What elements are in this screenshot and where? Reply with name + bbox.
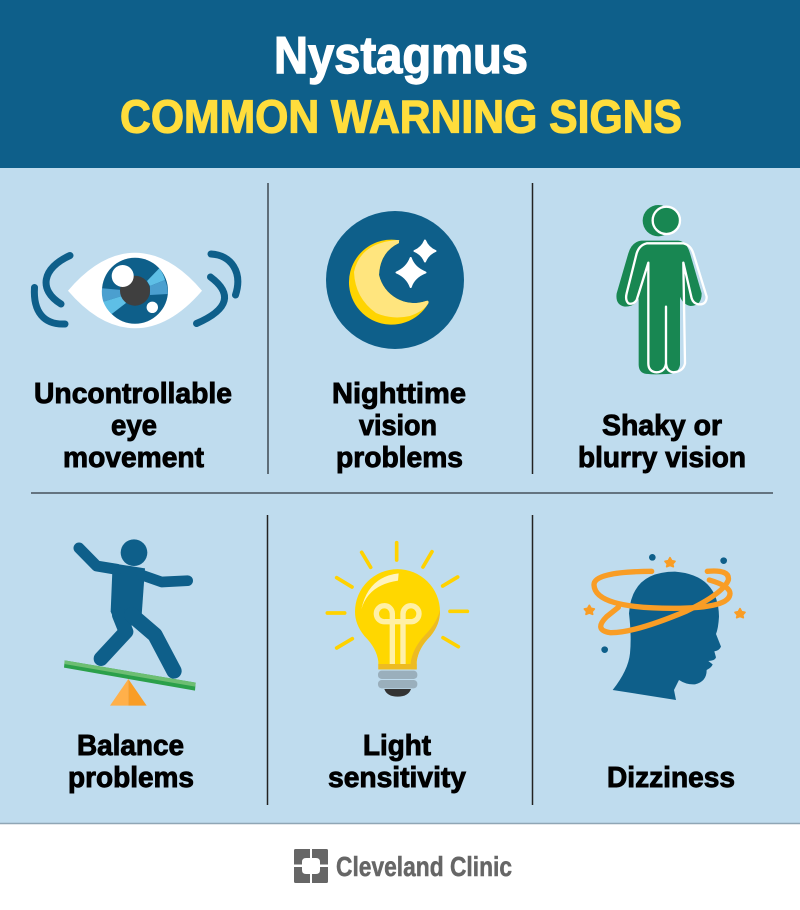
label: uncontrollable eye movement: Uncontrollable [34,378,232,410]
label: light sensitivity [328,730,466,794]
icon: eye [34,253,238,328]
label: light sensitivity: sensitivity [328,762,466,794]
panel: background [0,168,800,823]
subtitle: COMMON WARNING SIGNS [120,90,682,142]
label: light sensitivity: Light [363,730,431,762]
icon: moon and stars [326,211,464,349]
footer logo: Cleveland Clinic: Cleveland Clinic [336,851,512,882]
label: nighttime vision problems: Nighttime [332,378,466,410]
icon: dizzy head [584,554,745,700]
footer logo: Cleveland Clinic [294,849,512,883]
label: dizziness: Dizziness [607,762,735,794]
label: uncontrollable eye movement: eye [111,410,157,442]
label: nighttime vision problems: problems [336,442,463,474]
icon: light bulb [327,543,467,697]
label: balance problems [68,730,194,794]
label: balance problems: Balance [77,730,184,762]
logo mark [294,849,328,883]
label: shaky or blurry vision [578,410,746,474]
title: Nystagmus [274,27,528,85]
label: uncontrollable eye movement: movement [63,442,204,474]
label: balance problems: problems [68,762,194,794]
icon: person balancing on seesaw [64,539,196,706]
label: nighttime vision problems: vision [359,410,437,442]
label: shaky or blurry vision: Shaky or [602,410,722,442]
label: nighttime vision problems [332,378,466,474]
label: shaky or blurry vision: blurry vision [578,442,746,474]
icon: shaky figure [616,205,707,374]
label: uncontrollable eye movement [34,378,232,474]
header [0,0,800,168]
